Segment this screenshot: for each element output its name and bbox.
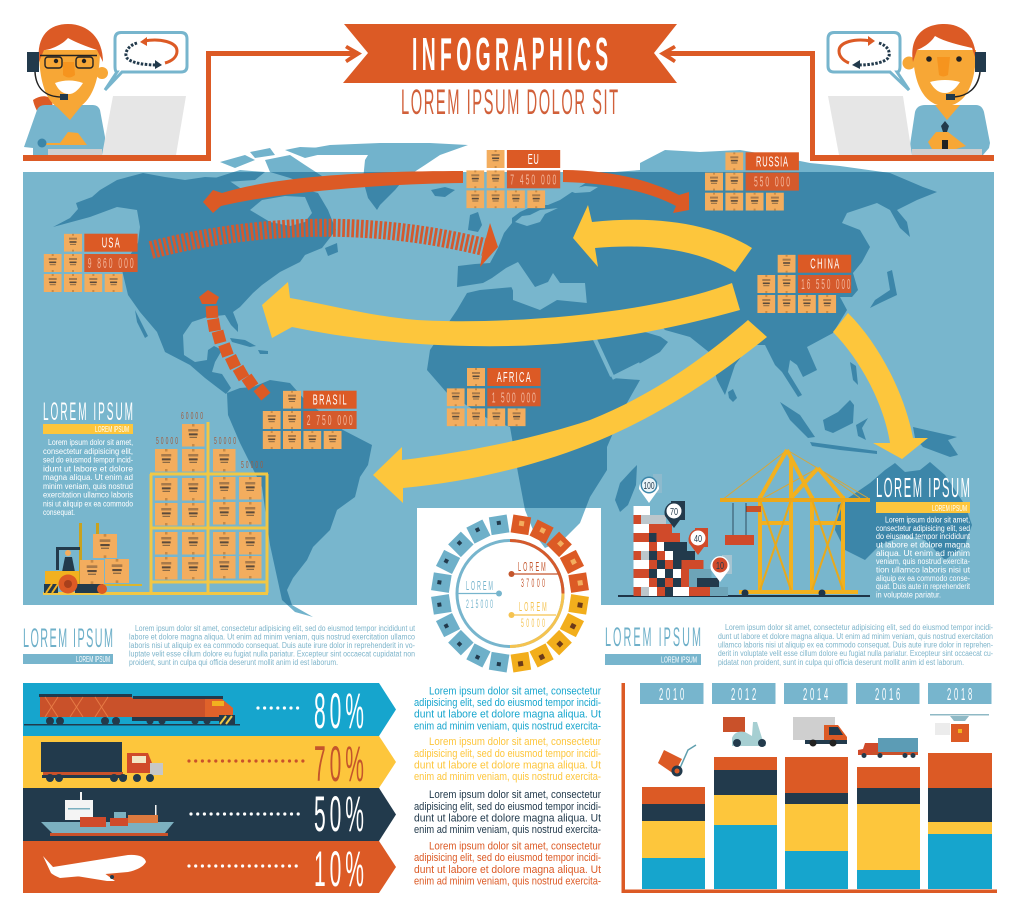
bar 2010 xyxy=(642,787,705,889)
cluster: Russia xyxy=(705,152,799,211)
right panel paragraph: tion ullamco laboris nisi ut xyxy=(876,566,971,574)
pin: 70: 70 xyxy=(670,507,678,518)
right panel heading: LOREM IPSUM xyxy=(876,472,970,504)
left panel paragraph: Lorem ipsum dolor sit amet, xyxy=(48,438,133,447)
container stack xyxy=(618,506,870,597)
white panel: distribution ring: 37000 xyxy=(521,577,545,590)
left panel yellow tag xyxy=(43,424,133,434)
left connector arrow xyxy=(23,45,362,161)
right panel paragraph: aliqua. Ut enim ad minim xyxy=(876,549,970,558)
text block: yellow: adipisicing elit, sed do eiusmod tempor incidi- xyxy=(414,748,601,760)
lower left paragraph: luptate velit esse cillum dolore eu fugiat nulla pariatur. Excepteur sint occaecat cupidatat non xyxy=(129,650,415,658)
year tabs: 2016 xyxy=(875,684,900,704)
panel: sea 50% xyxy=(23,787,396,843)
right panel paragraph: consectetur adipisicing elit, sed xyxy=(876,524,970,533)
year tabs: 2012 xyxy=(731,684,756,704)
bar 2014 xyxy=(785,757,848,889)
text block: navy: Lorem ipsum dolor sit amet, consectetur xyxy=(429,789,601,801)
lower left tag: LOREM IPSUM xyxy=(76,655,110,664)
bar 2018 xyxy=(928,753,992,889)
lower right heading: LOREM IPSUM xyxy=(605,622,701,653)
world map xyxy=(23,143,994,617)
text block: orange: enim ad minim veniam, quis nostrud exercita- xyxy=(414,876,601,888)
text block: orange xyxy=(414,840,601,888)
year tabs xyxy=(640,683,992,704)
left panel paragraph: nisi ut aliquip ex ea commodo xyxy=(43,499,134,508)
cluster: Africa xyxy=(447,368,541,426)
white panel: distribution ring xyxy=(431,515,589,672)
cluster: China: 16 550 000 xyxy=(801,277,850,293)
panel: road 70%: 70% xyxy=(314,737,364,793)
white panel: distribution ring: 50000 xyxy=(521,617,545,630)
cluster: EU: 7 450 000 xyxy=(510,171,557,188)
lower left paragraph: Lorem ipsum dolor sit amet, consectetur adipisicing elit, sed do eiusmod tempor incididunt ut xyxy=(135,624,416,633)
right connector arrow xyxy=(659,45,994,161)
left panel paragraph: sed do eiusmod tempor incid- xyxy=(43,456,133,464)
forklift xyxy=(44,523,142,594)
right panel paragraph: ut labore et dolore magna xyxy=(876,540,971,550)
pin: 40: 40 xyxy=(694,534,702,545)
lower left paragraph xyxy=(129,624,416,667)
white panel: distribution ring: 215000 xyxy=(466,598,493,611)
text block: yellow: Lorem ipsum dolor sit amet, consectetur xyxy=(429,736,601,748)
panel: air 10%: 10% xyxy=(314,842,364,898)
pin: 10: 10 xyxy=(716,561,724,572)
stacked bar chart xyxy=(622,683,997,893)
lower right paragraph xyxy=(718,623,993,667)
arrow: EU to Russia xyxy=(563,170,689,213)
speech bubble right xyxy=(828,32,909,90)
lower right tag: LOREM IPSUM xyxy=(661,656,697,664)
text block: blue: Lorem ipsum dolor sit amet, consectetur xyxy=(429,686,601,698)
lower left heading: LOREM IPSUM xyxy=(23,623,113,654)
left panel paragraph: magna aliqua. Ut enim ad xyxy=(43,473,133,482)
warehouse rack: 50000 xyxy=(156,435,178,447)
bar 2012 xyxy=(714,757,777,889)
lower left paragraph: laboris nisi ut aliquip ex ea commodo consequat. Duis aute irure dolor in reprehenderit in vo- xyxy=(129,641,415,650)
text block: navy: adipisicing elit, sed do eiusmod tempor incidi- xyxy=(414,801,601,813)
panel: sea 50%: 50% xyxy=(314,787,364,843)
cluster: USA: 9 860 000 xyxy=(88,255,134,272)
text block: navy: enim ad minim veniam, quis nostrud exercita- xyxy=(414,824,601,836)
male operator xyxy=(902,24,990,155)
text block: yellow xyxy=(414,736,601,783)
icon: container truck xyxy=(858,738,918,758)
left panel paragraph: idunt ut labore et dolore xyxy=(43,464,133,473)
title banner: INFOGRAPHICS xyxy=(412,30,608,80)
lower left tag xyxy=(23,654,113,664)
right panel paragraph: in voluptate pariatur. xyxy=(876,590,941,600)
icon: train xyxy=(24,694,240,726)
text block: navy xyxy=(414,789,601,836)
left panel paragraph xyxy=(43,438,134,517)
left panel paragraph: consequat. xyxy=(43,508,75,517)
text block: orange: Lorem ipsum dolor sit amet, consectetur xyxy=(429,840,601,852)
speech bubble left xyxy=(105,32,187,90)
port crane xyxy=(720,450,870,596)
white panel: distribution ring: LOREM xyxy=(466,580,493,594)
pin: 100 xyxy=(639,474,662,503)
text block: navy: dunt ut labore et dolore magna aliqua. Ut xyxy=(414,812,601,824)
lower left paragraph: labore et dolore magna aliqua. Ut enim ad minim veniam, quis nostrud exercitation ullamco xyxy=(129,632,415,642)
female operator xyxy=(24,24,108,155)
panel: road 70% xyxy=(23,736,396,793)
cluster: China xyxy=(757,255,851,313)
lower left paragraph: proident, sunt in culpa qui officia deserunt mollit anim id est laborum. xyxy=(129,658,338,667)
segmented arrow: Brasil to USA xyxy=(199,290,270,400)
left panel yellow tag: LOREM IPSUM xyxy=(95,425,129,434)
left panel paragraph: exercitation ullamco laboris xyxy=(43,490,133,500)
icon: delivery van xyxy=(793,717,847,746)
cluster: Africa: AFRICA xyxy=(497,368,531,386)
cluster: EU xyxy=(466,150,560,208)
right panel paragraph: veniam, quis nostrud exercita- xyxy=(876,557,970,566)
pin: 40 xyxy=(688,528,708,555)
yellow arrow: China to Australia xyxy=(833,313,928,459)
text block: orange: adipisicing elit, sed do eiusmod tempor incidi- xyxy=(414,852,601,864)
text block: blue: enim ad minim veniam, quis nostrud exercita- xyxy=(414,720,601,732)
right panel paragraph: Lorem ipsum dolor sit amet, xyxy=(885,516,970,524)
warehouse rack: 50000 xyxy=(241,459,263,471)
lower right paragraph: Lorem ipsum dolor sit amet, consectetur adipisicing elit, sed do eiusmod tempor incidi- xyxy=(725,623,993,632)
cluster: Brasil: BRASIL xyxy=(313,391,347,408)
text block: blue: adipisicing elit, sed do eiusmod tempor incidi- xyxy=(414,697,601,709)
left panel heading: LOREM IPSUM xyxy=(43,399,133,427)
left panel paragraph: consectetur adipisicing elit, xyxy=(43,447,133,456)
cluster: Africa: 1 500 000 xyxy=(492,389,536,406)
right panel yellow tag: LOREM IPSUM xyxy=(932,504,967,513)
lower right paragraph: pidatat non proident, sunt in culpa qui officia deserunt mollit anim id est laborum. xyxy=(718,658,964,667)
icon: container ship xyxy=(41,792,174,836)
panel: rail 80%: 80% xyxy=(314,684,364,740)
yellow arrow: China to EU xyxy=(573,205,752,272)
cluster: Brasil: 2 750 000 xyxy=(307,412,353,429)
pin: 70 xyxy=(664,501,685,528)
cluster: USA: USA xyxy=(102,234,120,251)
cluster: Russia: RUSSIA xyxy=(756,152,788,170)
striped arrow: USA to EU xyxy=(151,223,498,267)
warehouse rack xyxy=(43,410,268,594)
right panel paragraph: do eiusmod tempor incididunt xyxy=(876,532,971,541)
laptop left xyxy=(102,96,186,155)
yellow arrow: China to USA xyxy=(262,282,740,346)
panel: air 10% xyxy=(23,841,396,898)
right panel paragraph xyxy=(876,516,971,600)
left panel paragraph: minim veniam, quis nostrud xyxy=(43,482,133,491)
yellow arrow: China to Brasil xyxy=(373,320,767,503)
text block: blue: dunt ut labore et dolore magna aliqua. Ut xyxy=(414,708,601,720)
right panel paragraph: aliquip ex ea commodo conse- xyxy=(876,574,970,583)
cluster: EU: EU xyxy=(528,150,539,168)
cluster: Russia: 550 000 xyxy=(754,174,790,190)
subtitle: LOREM IPSUM DOLOR SIT xyxy=(401,83,618,122)
warehouse rack: 60000 xyxy=(181,410,203,422)
year tabs: 2014 xyxy=(803,684,828,704)
right panel paragraph: quat. Duis aute in reprehenderit xyxy=(876,582,971,591)
icon: drone xyxy=(930,714,989,742)
year tabs: 2018 xyxy=(947,684,972,704)
text block: yellow: enim ad minim veniam, quis nostrud exercita- xyxy=(414,771,601,783)
pin: 100: 100 xyxy=(644,481,655,492)
cluster: USA xyxy=(44,234,138,292)
right panel yellow tag xyxy=(876,502,970,513)
icon: hand truck xyxy=(658,745,696,776)
icon: airplane xyxy=(43,855,146,881)
lower right tag xyxy=(605,654,701,665)
text block: blue xyxy=(414,686,601,732)
panel: rail 80% xyxy=(23,683,396,740)
warehouse rack: 50000 xyxy=(214,435,236,447)
text block: orange: dunt ut labore et dolore magna aliqua. Ut xyxy=(414,864,601,876)
bar 2016 xyxy=(857,767,920,889)
title banner xyxy=(343,24,677,83)
cluster: China: CHINA xyxy=(810,255,839,272)
arrow: EU to USA xyxy=(203,171,463,213)
laptop right xyxy=(828,96,912,155)
icon: truck xyxy=(41,742,163,782)
year tabs: 2010 xyxy=(659,684,684,704)
white panel: distribution ring: LOREM xyxy=(518,561,546,575)
white panel: distribution ring: LOREM xyxy=(519,601,547,615)
pin: 10 xyxy=(710,555,732,582)
cluster: Brasil xyxy=(263,391,357,449)
text block: yellow: dunt ut labore et dolore magna aliqua. Ut xyxy=(414,760,601,772)
icon: scooter xyxy=(723,717,766,747)
